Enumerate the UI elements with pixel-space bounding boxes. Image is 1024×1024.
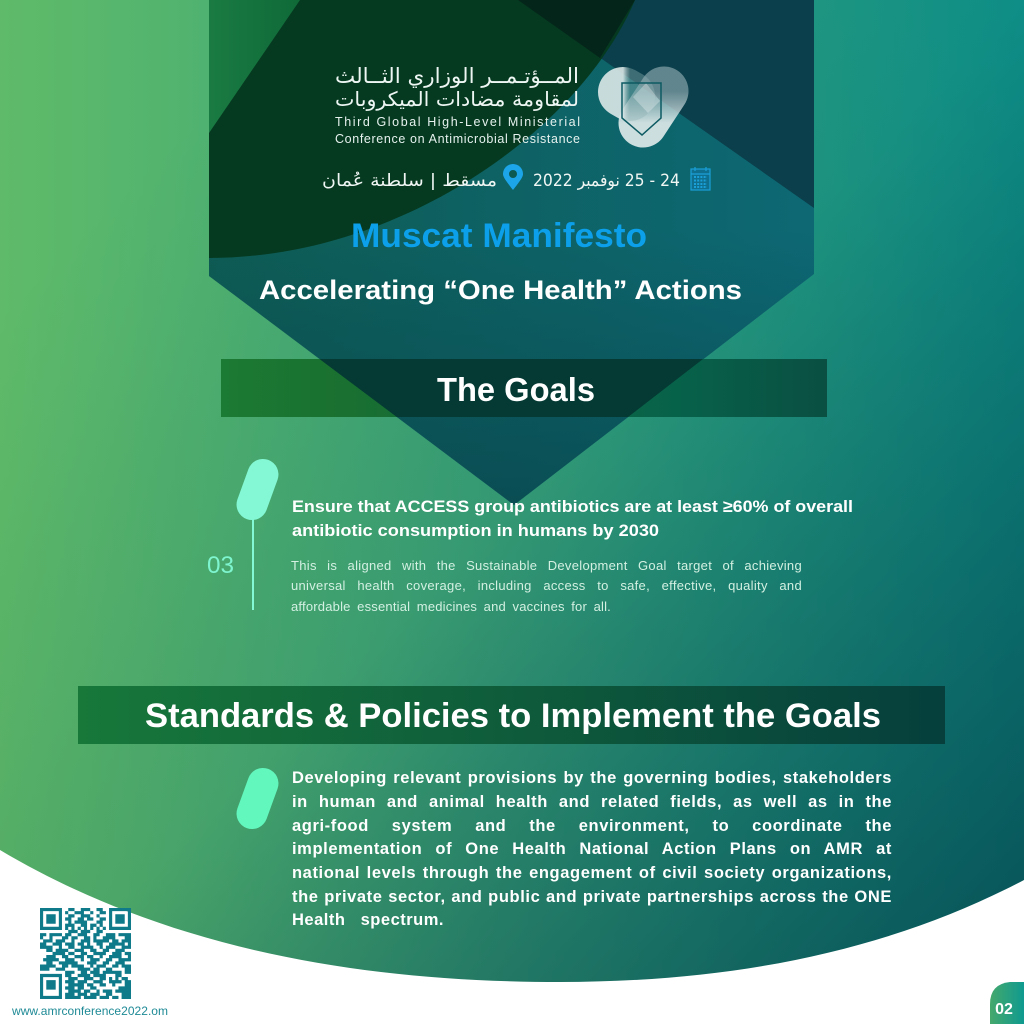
subtitle: Accelerating “One Health” Actions [259, 275, 742, 305]
banner: standards and policies [78, 686, 945, 744]
goal title line 1: Ensure that ACCESS group antibiotics are at least ≥60% of overall [292, 497, 853, 516]
goal body text: universal health coverage, including access to safe, effective, quality and [291, 578, 802, 593]
icon: goal pill marker [232, 455, 283, 524]
icon: policy pill marker [232, 764, 283, 833]
logo text english line 1: Third Global High-Level Ministerial [335, 115, 580, 129]
logo text arabic line 2: لمقاومة مضادات الميكروبات [335, 87, 579, 111]
website url: www.amrconference2022.om [11, 1004, 168, 1018]
page number tab [990, 982, 1024, 1024]
location text: مسقط | سلطنة عُمان [322, 171, 497, 191]
policy body text: implementation of One Health National Action Plans on AMR at [292, 840, 892, 858]
logo text arabic line 1: المــؤتـمــر الوزاري الثــالث [335, 64, 579, 88]
goal body text: This is aligned with the Sustainable Development Goal target of achieving [291, 558, 802, 573]
goal body text [291, 558, 802, 614]
timeline stem [252, 518, 254, 610]
policy body text: Developing relevant provisions by the governing bodies, stakeholders [292, 769, 892, 787]
logo: heart and shield [622, 83, 664, 135]
policy body text [292, 769, 892, 929]
white bottom curve [0, 850, 1024, 1024]
logo text english line 2: Conference on Antimicrobial Resistance [335, 132, 580, 146]
qr code [40, 910, 131, 997]
heading: the goals: The Goals [437, 371, 595, 408]
banner: the goals [221, 359, 827, 417]
policy body text: agri-food system and the environment, to coordinate the [292, 817, 892, 835]
goal number: 03 [207, 552, 234, 579]
page number tab: 02 [995, 1001, 1013, 1018]
icon: location pin [503, 164, 523, 190]
goal title line 2: antibiotic consumption in humans by 2030 [292, 521, 659, 540]
policy body text: national levels through the engagement of civil society organizations, [292, 864, 892, 882]
heading: standards and policies: Standards & Policies to Implement the Goals [145, 697, 881, 735]
goal body text: affordable essential medicines and vaccines for all. [291, 599, 611, 614]
icon: calendar [691, 167, 710, 190]
policy body text: the private sector, and public and private partnerships across the ONE [292, 888, 892, 906]
date text: 24 - 25 نوفمبر 2022 [533, 171, 680, 191]
policy body text: in human and animal health and related fields, as well as in the [292, 793, 892, 811]
policy body text: Health spectrum. [292, 911, 444, 929]
shield panel [209, 0, 814, 510]
title: muscat manifesto: Muscat Manifesto [351, 217, 647, 255]
